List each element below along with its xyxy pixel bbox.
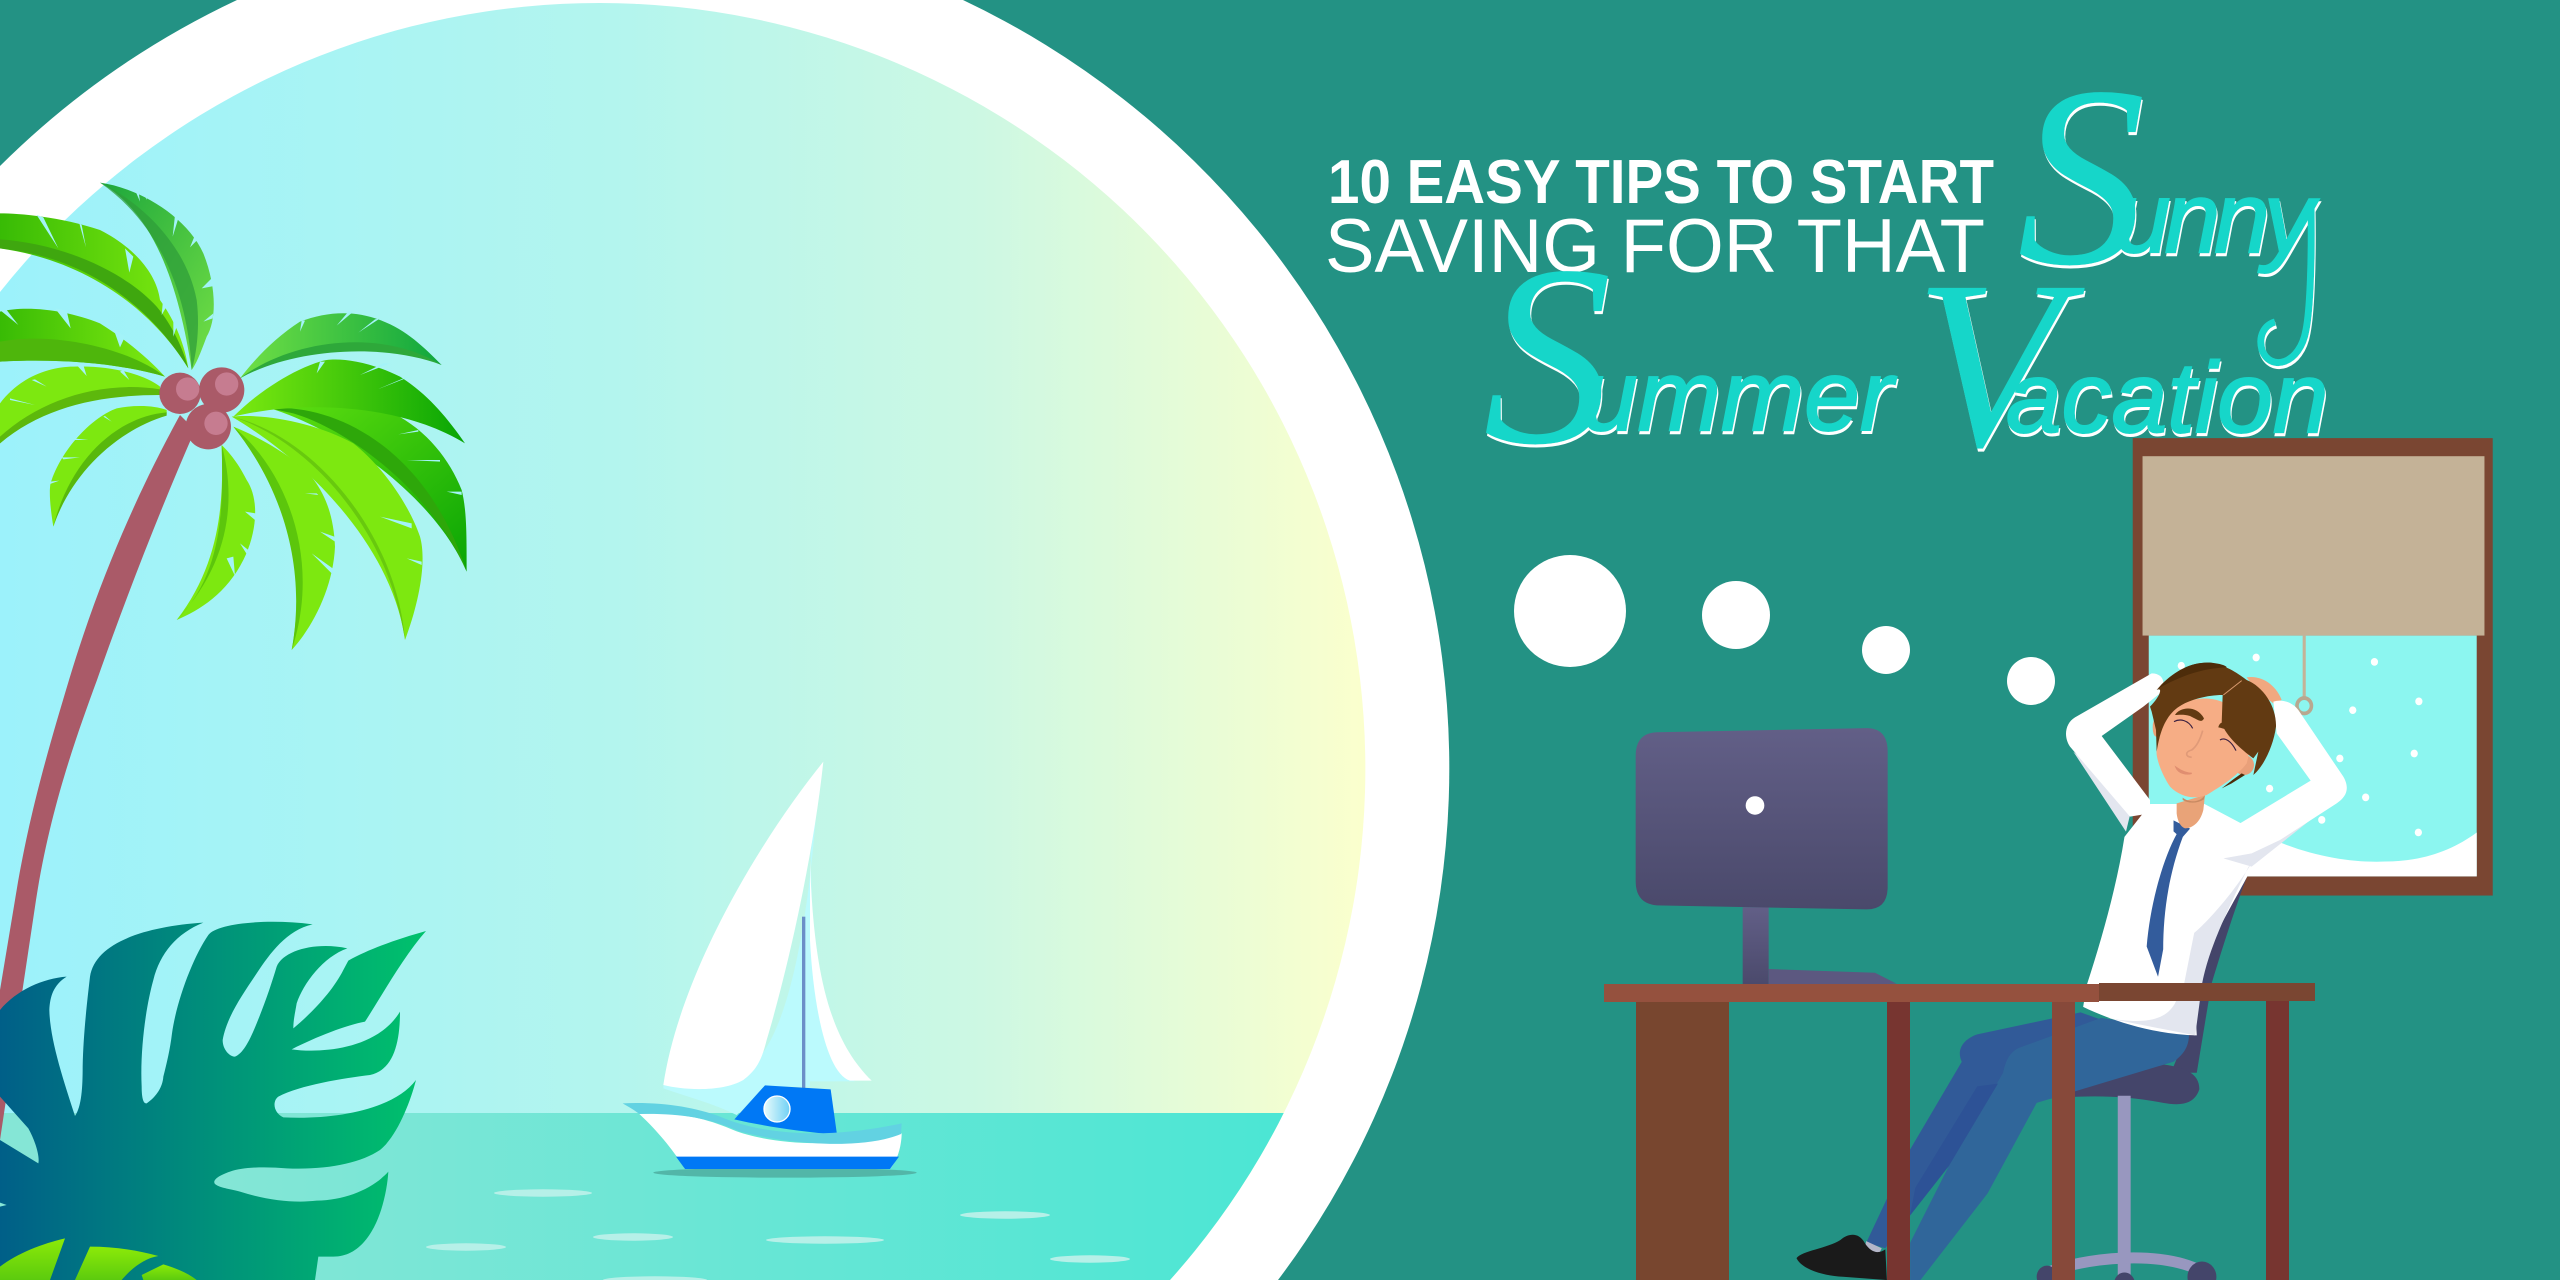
left arm <box>2066 673 2163 832</box>
frond: small bottom <box>177 445 255 620</box>
cabin <box>734 1085 837 1135</box>
frond: small left <box>50 406 167 527</box>
wave band <box>623 1103 902 1144</box>
script word: Vacation: V <box>1915 231 2085 497</box>
frond: lower right <box>232 416 423 640</box>
frond notches <box>0 189 462 576</box>
person upper body and head <box>2066 663 2347 867</box>
desk leg two <box>1887 1000 1910 1280</box>
coconuts <box>159 367 244 449</box>
script word: Summer: S <box>1483 212 1612 498</box>
hair <box>2150 663 2276 775</box>
main sail <box>663 762 823 1089</box>
monitor dot <box>1746 796 1764 815</box>
sailboat <box>623 762 917 1178</box>
hand behind head <box>2247 677 2282 703</box>
closed eyes <box>2174 720 2236 751</box>
snow ground <box>2149 823 2477 876</box>
frond: middle left <box>0 309 165 377</box>
trunk <box>0 415 195 1140</box>
rear sail shade <box>663 807 855 1115</box>
shoe <box>1796 1235 1887 1280</box>
tie <box>2147 820 2190 977</box>
eyebrows <box>2175 709 2247 747</box>
monstera leaf group <box>0 922 426 1280</box>
frond: upper left <box>0 213 188 368</box>
front leg <box>1910 1018 2189 1280</box>
window <box>2133 438 2493 896</box>
mouth <box>2176 767 2192 774</box>
frond: top <box>100 183 214 370</box>
person lower body and chair <box>1796 804 2266 1280</box>
script word: Sunny: unny <box>2115 162 2320 274</box>
title line one: 10 EASY TIPS TO START <box>1328 148 1994 217</box>
frond: far right back <box>270 403 467 572</box>
monitor base <box>1769 969 1897 987</box>
small lime leaf <box>0 1238 197 1280</box>
porthole <box>764 1096 790 1122</box>
neck <box>2177 795 2205 828</box>
blind cord <box>2297 636 2311 713</box>
white porthole ring <box>0 0 1449 1280</box>
desk top left <box>1604 984 2099 1002</box>
frond: lower left <box>0 366 160 443</box>
beach scene panel <box>0 3 1400 1280</box>
title <box>1325 33 2328 498</box>
water ripples <box>426 1189 1130 1280</box>
sky <box>0 3 1365 1280</box>
script word: Vacation: acation <box>2006 342 2328 454</box>
hull <box>639 1114 902 1169</box>
right ear <box>2234 755 2254 775</box>
title line two: SAVING FOR THAT <box>1325 204 1985 289</box>
hull stripe <box>676 1157 899 1169</box>
monstera leaf <box>0 922 426 1280</box>
sock <box>1865 1241 1882 1254</box>
desk leg three <box>2052 1000 2075 1280</box>
face <box>2156 698 2249 797</box>
computer monitor <box>1636 728 1897 987</box>
script word: Sunny <box>2017 33 2320 363</box>
nose <box>2187 731 2203 757</box>
window frame <box>2133 438 2493 896</box>
shirt <box>2083 804 2266 1035</box>
snowflakes <box>2178 654 2422 836</box>
back leg <box>1866 1012 2112 1248</box>
desk leg wide <box>1636 1000 1729 1280</box>
desk top right <box>2099 983 2315 1001</box>
boat shadow <box>653 1168 917 1178</box>
frond: upper right <box>233 360 465 443</box>
roller blind <box>2143 456 2484 636</box>
monitor stand <box>1743 907 1769 987</box>
palm fronds <box>0 183 467 650</box>
window glass <box>2149 636 2477 876</box>
chair <box>2037 864 2252 1280</box>
jib sail <box>810 860 872 1081</box>
desk <box>1604 983 2315 1280</box>
right arm <box>2223 701 2347 867</box>
palm tree <box>0 183 467 1140</box>
thought bubbles <box>1514 555 2055 705</box>
script word: Sunny: S <box>2017 33 2146 319</box>
sea <box>0 1113 1400 1280</box>
frond: top right <box>240 313 442 378</box>
frond: bottom <box>233 427 335 650</box>
leg shade <box>1910 1084 1998 1215</box>
back hair <box>2222 773 2245 788</box>
desk leg four <box>2266 1000 2289 1280</box>
script word: Summer: ummer <box>1582 340 1897 452</box>
left ear <box>2153 718 2159 737</box>
monitor screen <box>1636 728 1888 909</box>
mast <box>802 917 805 1090</box>
